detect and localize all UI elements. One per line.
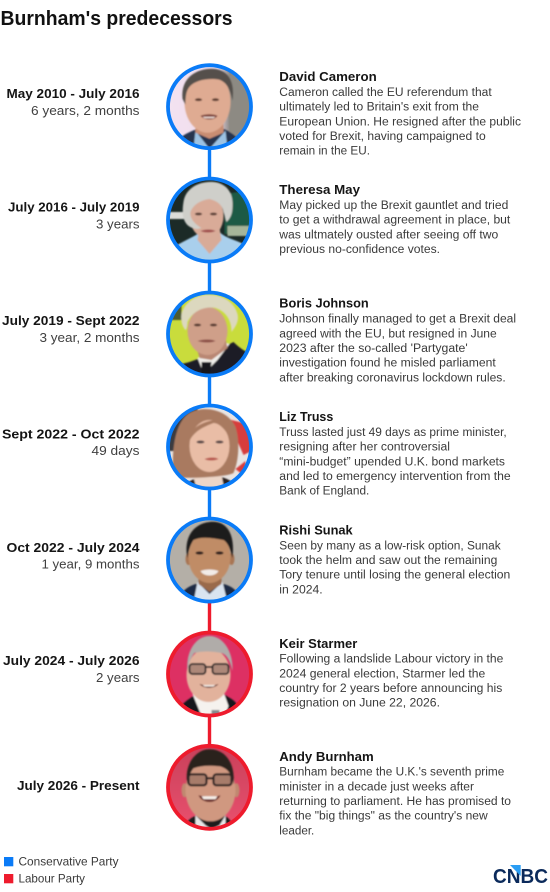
bio: Liz Truss: Bank of England. bbox=[279, 486, 369, 498]
bio: Boris Johnson: after breaking coronavirus lockdown rules. bbox=[279, 372, 506, 384]
portrait: Keir Starmer bbox=[168, 632, 251, 716]
bio: Keir Starmer: Keir Starmer bbox=[279, 636, 357, 651]
bio: Liz Truss: resigning after her controversial bbox=[279, 442, 450, 454]
bio: Rishi Sunak: in 2024. bbox=[279, 584, 323, 596]
bio: David Cameron: remain in the EU. bbox=[279, 146, 370, 158]
bio: Andy Burnham: Andy Burnham bbox=[279, 749, 374, 764]
bio: David Cameron: voted for Brexit, having campaigned to bbox=[279, 131, 486, 143]
dates: David Cameron: May 2010 - July 2016 bbox=[6, 86, 140, 101]
bio: Theresa May: Theresa May bbox=[279, 182, 361, 197]
bio: Keir Starmer bbox=[279, 636, 503, 710]
dates: Theresa May bbox=[8, 200, 140, 232]
dates: Liz Truss bbox=[2, 426, 140, 458]
bio: Liz Truss: and led to emergency intervention from the bbox=[279, 471, 511, 483]
dates: Boris Johnson bbox=[2, 313, 140, 345]
timeline connectors bbox=[208, 148, 211, 745]
bio: Liz Truss: Liz Truss bbox=[279, 409, 333, 424]
dates: David Cameron: 6 years, 2 months bbox=[31, 103, 140, 118]
bio: Keir Starmer: country for 2 years before announcing his bbox=[279, 683, 503, 695]
legend: Labour Party bbox=[18, 872, 85, 886]
bio: Boris Johnson: Boris Johnson bbox=[279, 296, 369, 311]
bio: Boris Johnson: 2023 after the so-called 'Partygate' bbox=[279, 343, 468, 355]
bio: Andy Burnham bbox=[279, 749, 511, 837]
dates: Keir Starmer: July 2024 - July 2026 bbox=[3, 653, 140, 668]
bio: Liz Truss: “mini-budget” upended U.K. bond markets bbox=[279, 456, 505, 468]
bio: David Cameron: ultimately led to Britain's exit from the bbox=[279, 102, 479, 114]
legend bbox=[4, 854, 118, 886]
portrait: Theresa May bbox=[168, 178, 252, 262]
bio: Keir Starmer: 2024 general election, Starmer led the bbox=[279, 668, 485, 680]
dates: Keir Starmer: 2 years bbox=[96, 670, 140, 685]
bio: Andy Burnham: minister in a decade just weeks after bbox=[279, 781, 474, 793]
bio: Andy Burnham: Burnham became the U.K.'s seventh prime bbox=[279, 767, 504, 779]
bio: Rishi Sunak: Tory tenure until losing the general election bbox=[279, 570, 510, 582]
bio: Liz Truss bbox=[279, 409, 511, 498]
title: Burnham's predecessors bbox=[0, 7, 232, 30]
bio: Rishi Sunak: took the helm and saw out the remaining bbox=[279, 555, 497, 567]
bio: Andy Burnham: returning to parliament. He has promised to bbox=[279, 796, 511, 808]
portrait: David Cameron bbox=[168, 65, 252, 149]
dates: Liz Truss: 49 days bbox=[92, 443, 140, 458]
dates: Rishi Sunak bbox=[6, 540, 140, 572]
bio: Keir Starmer: Following a landslide Labour victory in the bbox=[279, 654, 503, 666]
bio: Boris Johnson: agreed with the EU, but resigned in June bbox=[279, 328, 497, 340]
dates: David Cameron bbox=[6, 86, 140, 118]
dates: Rishi Sunak: Oct 2022 - July 2024 bbox=[6, 540, 140, 555]
bio: Rishi Sunak bbox=[279, 522, 510, 596]
dates: Liz Truss: Sept 2022 - Oct 2022 bbox=[2, 426, 140, 441]
portrait: Rishi Sunak bbox=[168, 518, 251, 602]
bio: Theresa May: previous no-confidence votes. bbox=[279, 244, 440, 256]
dates: Keir Starmer bbox=[3, 653, 140, 685]
bio: Theresa May: to get a withdrawal agreement in place, but bbox=[279, 215, 511, 227]
bio: Andy Burnham: fix the "big things" as the country's new bbox=[279, 811, 488, 823]
bio: Boris Johnson: Johnson finally managed to get a Brexit deal bbox=[279, 314, 516, 326]
dates: Boris Johnson: 3 year, 2 months bbox=[40, 330, 140, 345]
dates: Andy Burnham: July 2026 - Present bbox=[17, 778, 140, 793]
portrait: Liz Truss bbox=[168, 405, 252, 489]
portrait: Andy Burnham bbox=[168, 746, 251, 829]
bio: Theresa May: May picked up the Brexit gauntlet and tried bbox=[279, 200, 508, 212]
bio: Liz Truss: Truss lasted just 49 days as prime minister, bbox=[279, 427, 507, 439]
bio: Theresa May: was ultmately ousted after seeing off two bbox=[278, 229, 498, 241]
dates: Theresa May: July 2016 - July 2019 bbox=[8, 200, 140, 215]
bio: Keir Starmer: resignation on June 22, 2026. bbox=[279, 698, 440, 710]
legend: Conservative Party bbox=[18, 854, 118, 868]
dates: Boris Johnson: July 2019 - Sept 2022 bbox=[2, 313, 140, 328]
bio: Rishi Sunak: Seen by many as a low-risk option, Sunak bbox=[279, 540, 501, 552]
bio: Andy Burnham: leader. bbox=[279, 825, 314, 837]
bio: David Cameron: David Cameron bbox=[279, 69, 377, 84]
bio: Theresa May bbox=[278, 182, 511, 256]
bio: Rishi Sunak: Rishi Sunak bbox=[279, 522, 353, 537]
portrait: Boris Johnson bbox=[168, 292, 252, 376]
bio: Boris Johnson bbox=[279, 296, 516, 384]
dates: Theresa May: 3 years bbox=[96, 216, 140, 232]
dates: Rishi Sunak: 1 year, 9 months bbox=[42, 556, 140, 572]
bio: Boris Johnson: investigation found he misled parliament bbox=[279, 358, 497, 370]
bio: David Cameron: European Union. He resigned after the public bbox=[279, 116, 521, 128]
bio: David Cameron: Cameron called the EU referendum that bbox=[279, 87, 493, 99]
bio: David Cameron bbox=[279, 69, 521, 158]
